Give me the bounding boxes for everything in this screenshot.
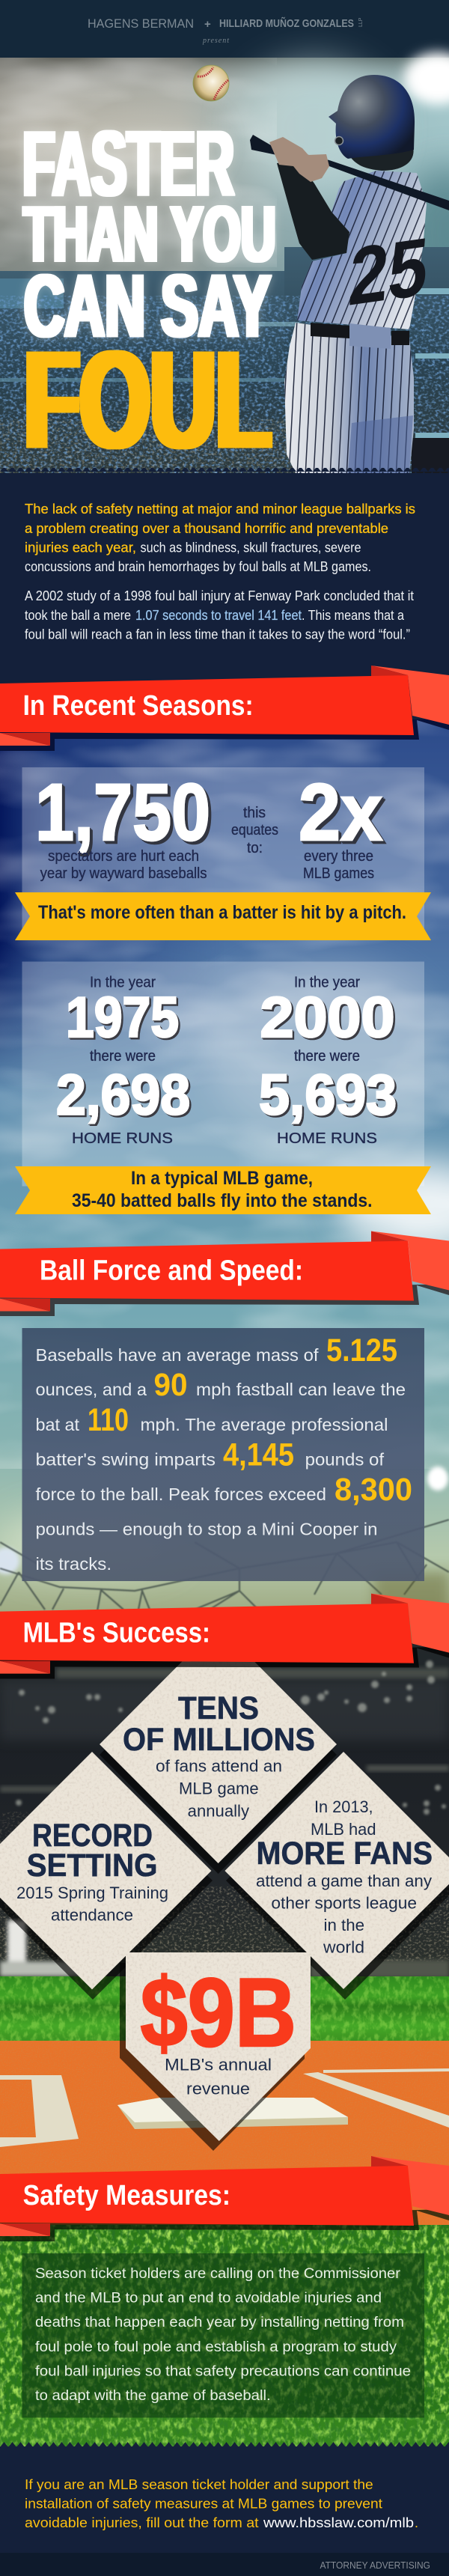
banner: batted balls <box>15 1166 431 1214</box>
diamond: tens of millions: annually <box>188 1802 249 1821</box>
sky background for stats <box>0 720 449 1648</box>
stadium roof lattice <box>0 1520 449 1611</box>
column: 1975: HOME RUNS <box>72 1130 173 1147</box>
diamond: more fans: world <box>323 1937 364 1957</box>
home plate: revenue <box>120 1952 311 2151</box>
column: 2000: there were <box>294 1048 360 1065</box>
home plate base <box>117 2098 348 2129</box>
diamond: more fans: In 2013, <box>314 1797 373 1816</box>
diamond: tens of millions: OF MILLIONS <box>123 1722 315 1758</box>
intro text: 1.07 seconds to travel 141 feet <box>135 608 302 623</box>
equates label: equates <box>231 822 278 838</box>
panel: ball force and speed: force to the ball. Peak forces exceed <box>36 1485 326 1504</box>
panel: ball force and speed: 8,300 <box>335 1472 412 1508</box>
diamond: more fans: MLB had <box>311 1820 376 1839</box>
title line: CAN SAY: CAN SAY <box>24 256 271 356</box>
panel: ball force and speed: its tracks. <box>36 1554 112 1574</box>
ribbon heading: safety measures <box>0 2156 449 2241</box>
chalk batter's box <box>0 2075 79 2147</box>
diamond: record setting: 2015 Spring Training <box>16 1884 168 1902</box>
home plate: revenue: MLB's annual <box>165 2055 272 2074</box>
intro text: foul ball will reach a fan in less time than it takes to say the word “foul.” <box>25 627 410 642</box>
intro text: took the ball a mere <box>25 608 131 623</box>
panel: spectator injury stats: MLB games <box>303 865 374 882</box>
diamond: more fans: MORE FANS <box>256 1836 433 1872</box>
header bar with law firm names: HAGENS BERMAN <box>88 16 194 31</box>
bat <box>250 135 449 210</box>
infield grass and dirt <box>0 1976 449 2235</box>
diamond: more fans: in the <box>323 1916 364 1934</box>
header bar with law firm names: present <box>202 37 229 45</box>
intro text: The lack of safety netting at major and minor league ballparks is <box>25 502 415 517</box>
panel: ball force and speed: 110 <box>88 1402 129 1438</box>
footer call to action: . <box>415 2515 418 2530</box>
column: 2000 <box>259 975 397 1147</box>
header bar with law firm names: LLP <box>358 17 364 27</box>
panel: ball force and speed: mph. The average professional <box>141 1415 388 1434</box>
main title <box>22 113 275 478</box>
footer call to action: If you are an MLB season ticket holder and support the <box>25 2477 373 2492</box>
banner: batted balls: In a typical MLB game, <box>131 1168 313 1189</box>
diamond: record setting: SETTING <box>27 1848 158 1884</box>
belt <box>311 323 409 345</box>
icon: baseball in flight <box>193 65 229 101</box>
column: 1975: 1975 <box>66 986 179 1050</box>
panel: ball force and speed: Baseballs have an average mass of <box>36 1345 319 1365</box>
pants <box>284 323 414 473</box>
jersey <box>297 171 427 329</box>
navy intro panel <box>0 468 449 728</box>
crowd bokeh lights <box>16 1660 446 1815</box>
panel: safety measures text: and the MLB to put an end to avoidable injuries and <box>35 2291 382 2306</box>
stadium background <box>0 1643 449 1980</box>
column: 1975 <box>56 975 190 1147</box>
stat: 2x: 2x <box>299 767 382 857</box>
panel: safety measures text: foul ball injuries so that safety precautions can continue <box>35 2364 411 2379</box>
equates label: to: <box>247 840 263 856</box>
helmet <box>329 75 415 159</box>
panel: ball force and speed <box>22 1328 424 1581</box>
panel: safety measures text: foul pole to foul pole and establish a program to study <box>35 2339 397 2355</box>
panel: safety measures text: deaths that happen each year by installing netting from <box>35 2315 404 2330</box>
column: 2000: HOME RUNS <box>277 1130 377 1147</box>
diamond: record setting: attendance <box>51 1906 133 1925</box>
intro text: A 2002 study of a 1998 foul ball injury at Fenway Park concluded that it <box>25 588 414 603</box>
footer call to action: www.hbsslaw.com/mlb <box>263 2515 414 2530</box>
hands <box>269 137 329 182</box>
diamond: record setting <box>0 1752 213 2000</box>
ribbon heading: ball force and speed <box>0 1231 449 1316</box>
intro text: a problem creating over a thousand horrific and preventable <box>25 521 388 536</box>
footer call to action: installation of safety measures at MLB games to prevent <box>25 2497 382 2512</box>
arm sleeve <box>277 160 349 260</box>
header bar with law firm names: HILLIARD MUÑOZ GONZALES <box>219 16 354 30</box>
panel: spectator injury stats <box>22 767 424 932</box>
panel: ball force and speed: pounds of <box>305 1449 385 1469</box>
header bar with law firm names: + <box>204 18 211 31</box>
panel: ball force and speed: bat at <box>36 1415 80 1434</box>
column: 2000: In the year <box>294 975 360 991</box>
ribbon heading: in recent seasons <box>0 666 449 751</box>
footer disclaimer bar: ATTORNEY ADVERTISING <box>320 2560 430 2571</box>
banner: batted balls: 35-40 batted balls fly into the stands. <box>72 1190 373 1211</box>
banner: hit by pitch: That's more often than a batter is hit by a pitch. <box>38 902 406 923</box>
panel: ball force and speed: pounds — enough to stop a Mini Cooper in <box>36 1520 378 1539</box>
illustration: batter from behind <box>250 75 449 473</box>
panel: ball force and speed: ounces, and a <box>36 1380 147 1399</box>
column: 1975: 2,698 <box>56 1064 190 1127</box>
panel: ball force and speed: batter's swing imparts <box>36 1449 216 1469</box>
column: 2000: 5,693 <box>259 1064 397 1127</box>
panel: ball force and speed: 90 <box>154 1367 187 1403</box>
banner: hit by pitch <box>15 892 431 940</box>
ribbon heading: MLB's success <box>0 1594 449 1678</box>
panel: safety measures text <box>22 2253 424 2418</box>
footer disclaimer bar <box>0 2553 449 2576</box>
hair <box>348 147 414 171</box>
title line: FOUL: FOUL <box>24 323 271 478</box>
diamond: tens of millions: TENS <box>178 1690 259 1726</box>
ribbon heading: MLB's success: MLB's Success: <box>23 1618 210 1649</box>
diamond: more fans: attend a game than any <box>256 1872 432 1890</box>
column: 1975: In the year <box>90 975 156 991</box>
title line: THAN YOU: THAN YOU <box>24 190 275 278</box>
intro text: injuries each year, <box>25 541 136 555</box>
jersey number: 25 <box>346 220 431 323</box>
panel: ball force and speed: 5.125 <box>326 1333 397 1368</box>
home plate: revenue: $9B <box>141 1958 296 2067</box>
panel: safety measures text: Season ticket holders are calling on the Commissioner <box>35 2266 401 2282</box>
column: 1975: there were <box>90 1048 156 1065</box>
home plate: revenue: revenue <box>186 2080 250 2098</box>
diamond: tens of millions: of fans attend an <box>156 1757 282 1776</box>
diamond: record setting: RECORD <box>32 1818 153 1854</box>
panel: spectator injury stats: every three <box>304 848 373 865</box>
footer call to action <box>0 2442 449 2553</box>
diamond: more fans: other sports league <box>271 1894 417 1913</box>
intro text: . This means that a <box>302 608 405 623</box>
intro text: concussions and brain hemorrhages by foul balls at MLB games. <box>25 559 371 574</box>
panel: ball force and speed: mph fastball can leave the <box>196 1380 406 1399</box>
panel: ball force and speed: 4,145 <box>223 1437 294 1473</box>
equates label <box>231 805 278 856</box>
ribbon heading: in recent seasons: In Recent Seasons: <box>23 690 254 722</box>
ribbon heading: safety measures: Safety Measures: <box>23 2180 230 2211</box>
chalk foul lines <box>303 2072 449 2128</box>
column: 2000: 2000 <box>260 986 395 1050</box>
footer call to action: avoidable injuries, fill out the form at <box>25 2515 259 2530</box>
stat: 1,750: 1,750 <box>35 767 210 857</box>
equates label: this <box>243 805 266 821</box>
diamond: tens of millions: MLB game <box>179 1779 259 1798</box>
intro text <box>25 502 415 642</box>
hero photo: stadium sky and crowd <box>0 52 449 473</box>
intro text: such as blindness, skull fractures, severe <box>141 541 361 555</box>
ribbon heading: ball force and speed: Ball Force and Speed: <box>40 1255 303 1286</box>
grass background for safety section <box>0 2225 449 2446</box>
title line: FASTER: FASTER <box>22 113 234 216</box>
diamond: tens of millions <box>100 1625 337 1874</box>
header bar with law firm names <box>0 0 449 58</box>
panel: home run comparison <box>22 961 424 1186</box>
panel: spectator injury stats: year by wayward baseballs <box>40 865 207 882</box>
panel: safety measures text: to adapt with the game of baseball. <box>35 2388 271 2404</box>
panel: spectator injury stats: spectators are hurt each <box>48 848 199 865</box>
diamond: more fans <box>224 1752 449 2000</box>
